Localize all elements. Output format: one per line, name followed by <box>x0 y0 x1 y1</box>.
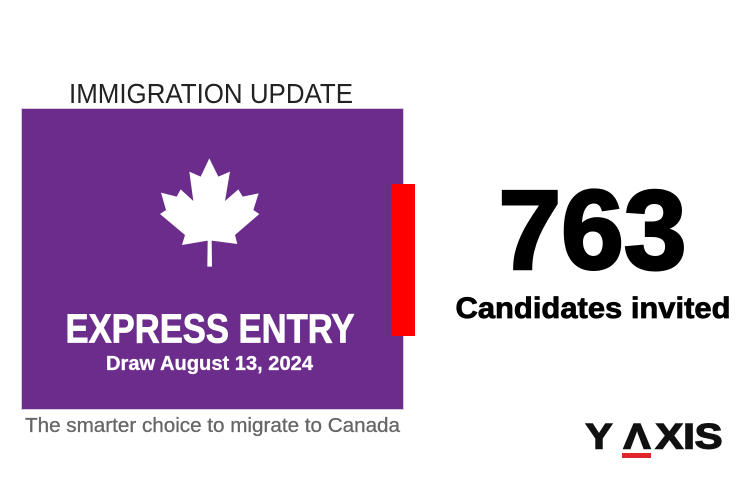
logo: y-axis <box>586 418 722 458</box>
heading: immigration update: IMMIGRATION UPDATE <box>69 78 353 109</box>
red accent bar <box>391 184 415 336</box>
draw date: Draw August 13, 2024 <box>106 353 314 375</box>
number label: Candidates invited <box>456 292 730 325</box>
logo letters xis: XIS <box>656 418 722 456</box>
panel: express entry <box>22 108 404 410</box>
logo letter a: Λ <box>624 418 651 456</box>
panel background <box>22 108 404 410</box>
panel title: EXPRESS ENTRY <box>66 306 354 352</box>
icon: maple leaf <box>160 158 259 267</box>
logo letter y: Y <box>586 418 612 456</box>
statistic: candidates invited <box>456 168 730 325</box>
logo red underline <box>622 453 651 458</box>
number: 763 <box>498 168 686 292</box>
tagline: The smarter choice to migrate to Canada <box>25 415 401 437</box>
